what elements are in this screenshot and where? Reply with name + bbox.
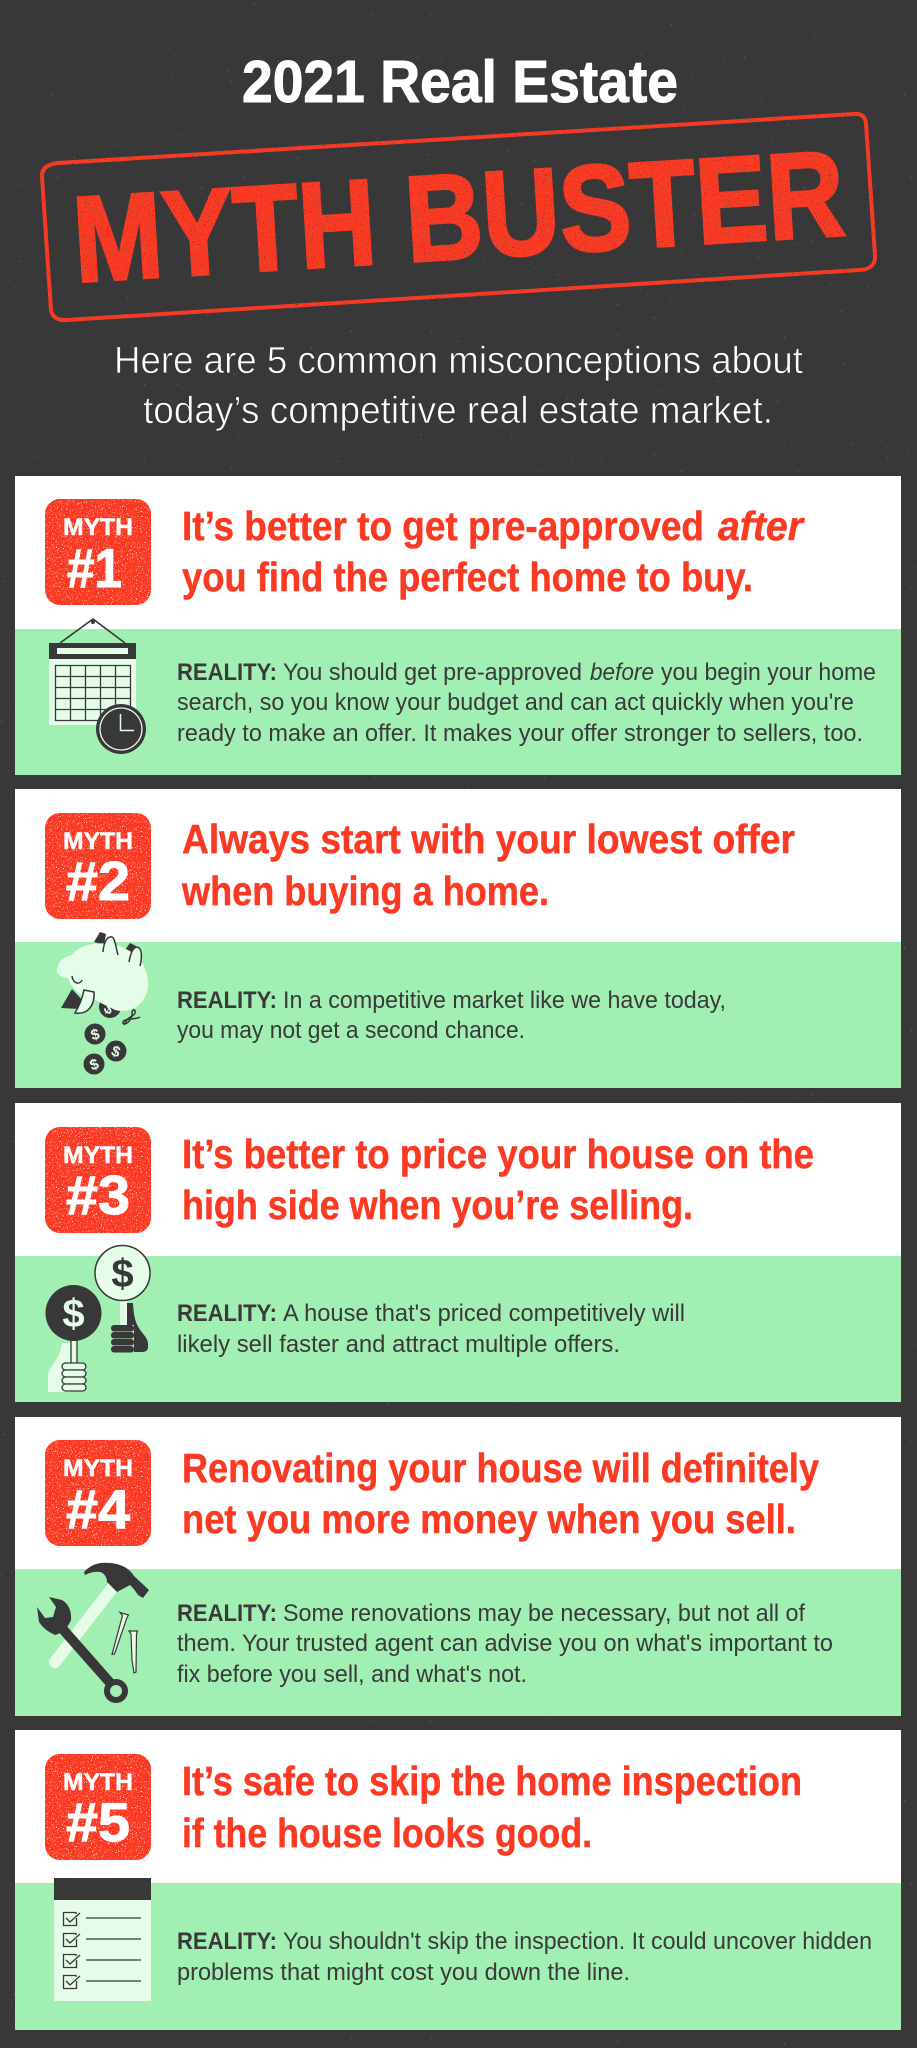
badge: myth 1: #1 <box>67 537 122 599</box>
reality: myth 2: In a competitive market like we have today, <box>283 987 726 1014</box>
headline: myth 5: It’s safe to skip the home inspection <box>182 1758 802 1804</box>
headline: myth 4: net you more money when you sell. <box>182 1496 796 1542</box>
headline: myth 1: It’s better to get pre-approved <box>182 503 704 549</box>
reality: myth 5: You shouldn't skip the inspection. It could uncover hidden <box>283 1928 872 1955</box>
headline: myth 2: Always start with your lowest offer <box>182 816 795 862</box>
intro text <box>114 340 803 432</box>
reality: myth 1 <box>177 659 876 747</box>
icon: piggy bank dropping coins: $ <box>100 1000 117 1019</box>
icon: calendar and clock <box>49 619 146 754</box>
panel: myth 4 <box>15 1417 901 1716</box>
headline: myth 1 <box>182 503 805 600</box>
badge: myth 4: MYTH <box>63 1455 133 1482</box>
headline: myth 1: you find the perfect home to buy. <box>182 554 753 600</box>
intro text: today’s competitive real estate market. <box>143 390 773 432</box>
panel: myth 3 <box>15 1103 901 1402</box>
reality: myth 3: A house that's priced competitively will <box>283 1300 685 1327</box>
headline: myth 3: high side when you’re selling. <box>182 1182 693 1228</box>
reality: myth 2: REALITY: <box>177 987 277 1014</box>
badge: myth 1 <box>45 499 151 605</box>
headline: myth 4 <box>182 1445 819 1542</box>
reality: myth 1: You should get pre-approved <box>283 659 582 686</box>
reality: myth 1: ready to make an offer. It makes your offer stronger to sellers, too. <box>177 720 863 747</box>
reality: myth 3: likely sell faster and attract multiple offers. <box>177 1331 620 1358</box>
reality: myth 4: fix before you sell, and what's not. <box>177 1661 527 1688</box>
reality: myth 3 <box>177 1300 685 1358</box>
headline: myth 2: when buying a home. <box>181 868 549 914</box>
headline: myth 5 <box>182 1758 802 1856</box>
icon: hammer, wrench and nails <box>37 1563 149 1700</box>
panel: myth 1 <box>15 476 901 775</box>
headline: myth 3: It’s better to price your house on the <box>182 1131 814 1177</box>
badge: myth 2 <box>45 813 151 919</box>
reality: myth 2: you may not get a second chance. <box>177 1017 525 1044</box>
badge: myth 3: MYTH <box>63 1142 133 1169</box>
title: 2021 Real Estate <box>242 49 678 115</box>
badge: myth 3 <box>45 1127 151 1233</box>
icon: hands holding dollar signs <box>46 1246 150 1392</box>
badge: myth 5 <box>45 1754 151 1860</box>
reality: myth 4: REALITY: <box>177 1600 277 1627</box>
reality: myth 1: REALITY: <box>177 659 277 686</box>
icon: inspection checklist <box>54 1878 151 2001</box>
badge: myth 4: #4 <box>66 1478 130 1540</box>
intro text: Here are 5 common misconceptions about <box>114 340 803 382</box>
badge: myth 5: #5 <box>66 1791 130 1853</box>
badge: myth 2: #2 <box>66 850 130 912</box>
reality: myth 1: search, so you know your budget and can act quickly when you're <box>177 689 854 716</box>
reality: myth 3: REALITY: <box>177 1300 277 1327</box>
reality: myth 2 <box>177 987 726 1044</box>
icon: piggy bank dropping coins: $ <box>88 1055 102 1074</box>
panel: myth 2 <box>15 789 901 1088</box>
headline: myth 1: after <box>718 503 805 549</box>
icon: piggy bank dropping coins <box>57 932 148 1074</box>
icon: hands holding dollar signs: $ <box>111 1252 134 1296</box>
reality: myth 5 <box>177 1928 872 1986</box>
icon: hands holding dollar signs: $ <box>62 1292 85 1336</box>
reality: myth 4 <box>177 1600 833 1688</box>
headline: myth 3 <box>182 1131 814 1228</box>
reality: myth 5: REALITY: <box>177 1928 277 1955</box>
badge: myth 1: MYTH <box>63 514 133 541</box>
headline: myth 5: if the house looks good. <box>182 1810 592 1856</box>
icon: piggy bank dropping coins: $ <box>109 1043 123 1062</box>
headline: myth 4: Renovating your house will definitely <box>182 1445 819 1491</box>
reality: myth 1: you begin your home <box>661 659 876 686</box>
reality: myth 4: Some renovations may be necessary, but not all of <box>283 1600 805 1627</box>
badge: myth 3: #3 <box>66 1164 130 1226</box>
headline: myth 2 <box>181 816 795 914</box>
reality: myth 1: before <box>590 659 654 686</box>
badge: myth 5: MYTH <box>63 1769 133 1796</box>
panel: myth 5 <box>15 1730 901 2030</box>
reality: myth 4: them. Your trusted agent can advise you on what's important to <box>177 1630 833 1657</box>
badge: myth 2: MYTH <box>63 828 133 855</box>
badge: myth 4 <box>45 1440 151 1546</box>
icon: piggy bank dropping coins: $ <box>89 1026 102 1044</box>
reality: myth 5: problems that might cost you down the line. <box>177 1959 630 1986</box>
